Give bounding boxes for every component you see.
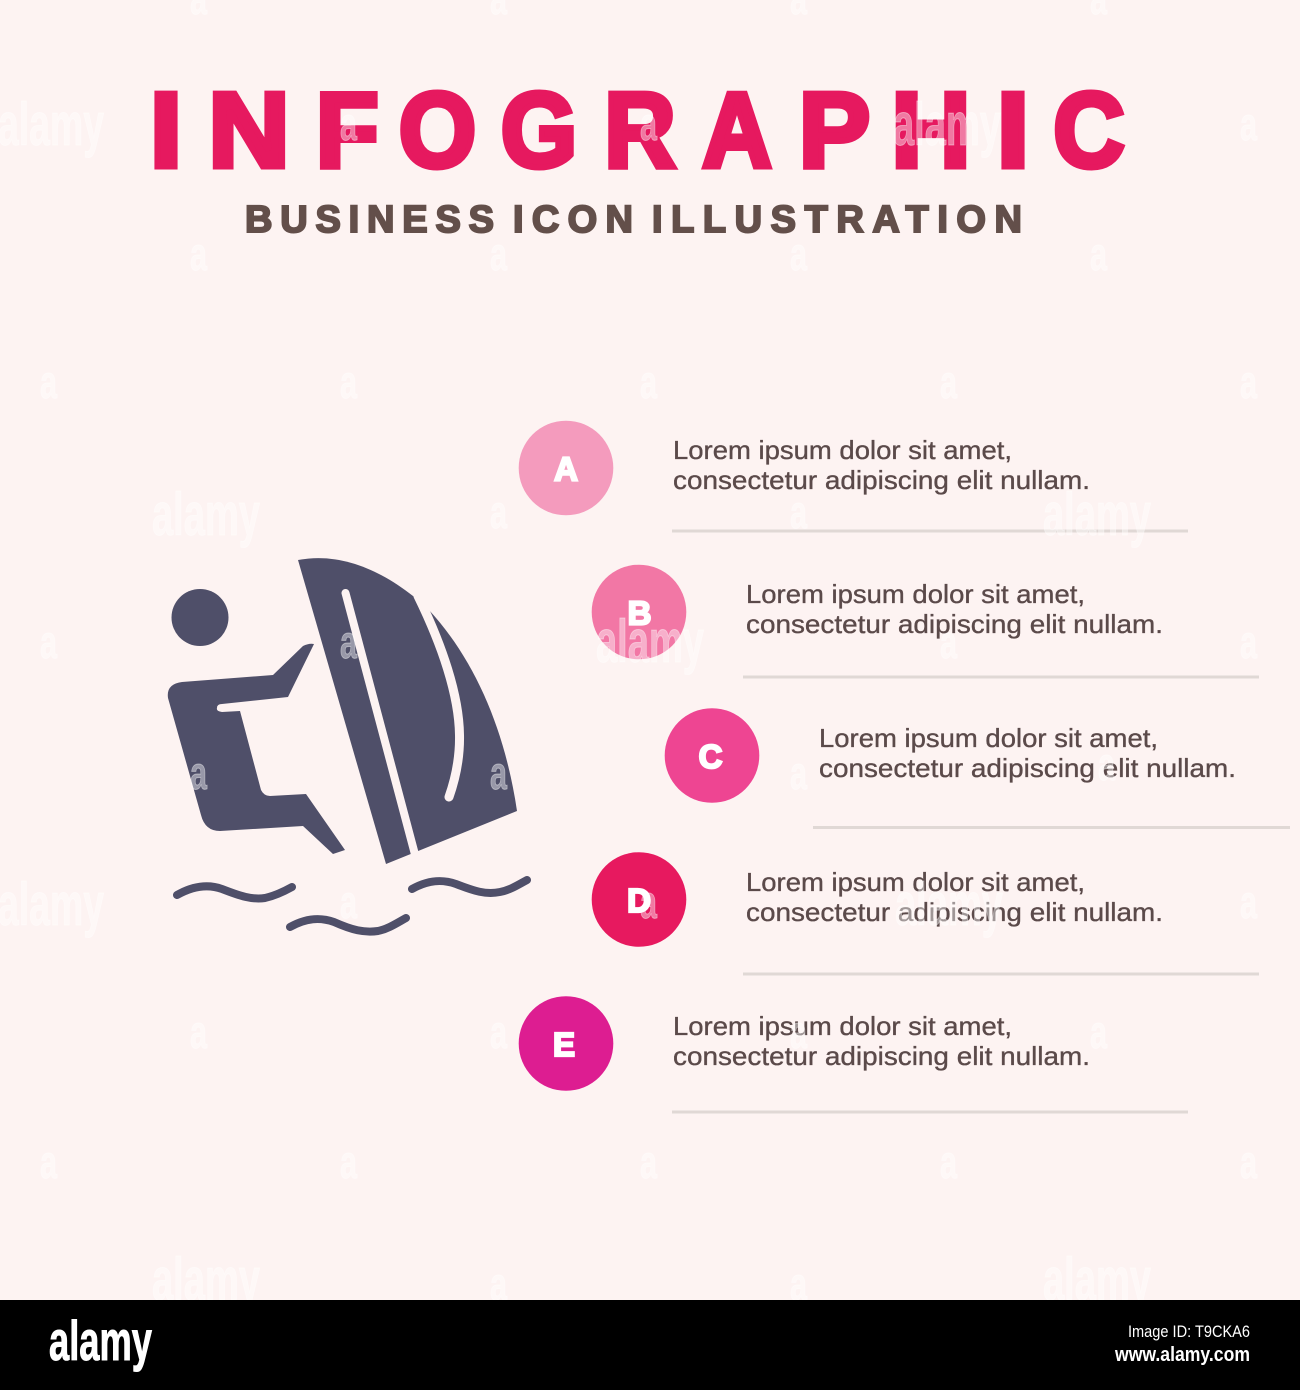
watermarks: a bbox=[1240, 616, 1257, 668]
subtitle: ILLUSTRATION bbox=[652, 199, 1022, 241]
title: G bbox=[501, 72, 577, 190]
watermarks: a bbox=[1098, 738, 1115, 790]
watermarks: a bbox=[340, 616, 357, 668]
title: C bbox=[1054, 72, 1124, 190]
icon: body bbox=[168, 644, 345, 854]
watermarks: a bbox=[790, 747, 807, 799]
divider D bbox=[743, 972, 1259, 976]
step A bbox=[519, 421, 1188, 532]
text E: Lorem ipsum dolor sit amet, bbox=[673, 1011, 1012, 1041]
watermarks: alamy bbox=[152, 481, 260, 548]
watermarks: a bbox=[1240, 98, 1257, 150]
step D bbox=[592, 852, 1259, 976]
circle D bbox=[592, 852, 686, 947]
title: P bbox=[799, 72, 870, 190]
title bbox=[150, 72, 1124, 190]
watermarks: a bbox=[40, 616, 57, 668]
image id: Image ID: T9CKA6 bbox=[1128, 1322, 1250, 1341]
watermarks: a bbox=[190, 1006, 207, 1058]
icon: sail curve slit bbox=[418, 596, 460, 797]
icon: sail bbox=[298, 558, 517, 864]
watermarks: a bbox=[340, 98, 357, 150]
title: I bbox=[997, 72, 1029, 190]
text A: consectetur adipiscing elit nullam. bbox=[673, 465, 1090, 495]
watermarks: a bbox=[490, 1258, 507, 1310]
watermarks: a bbox=[490, 1006, 507, 1058]
title: I bbox=[150, 72, 182, 190]
title: F bbox=[316, 72, 378, 190]
title: H bbox=[892, 72, 970, 190]
text B: Lorem ipsum dolor sit amet, bbox=[746, 579, 1085, 609]
watermarks: alamy bbox=[1043, 1246, 1151, 1313]
divider C bbox=[813, 826, 1290, 829]
icon: wave left bbox=[177, 886, 292, 899]
subtitle: ICON bbox=[513, 199, 633, 241]
letter C: C bbox=[699, 738, 722, 775]
watermarks: a bbox=[490, 228, 507, 280]
watermarks: alamy bbox=[596, 608, 704, 675]
watermarks: a bbox=[640, 356, 657, 408]
text B bbox=[746, 579, 1163, 639]
watermarks: a bbox=[40, 356, 57, 408]
title: N bbox=[208, 72, 290, 190]
text D bbox=[746, 867, 1163, 927]
letter B: B bbox=[628, 594, 651, 632]
watermarks: a bbox=[340, 876, 357, 928]
website: www.alamy.com bbox=[1114, 1344, 1250, 1366]
watermarks: a bbox=[1240, 356, 1257, 408]
watermarks: a bbox=[1090, 228, 1107, 280]
footer bar bbox=[0, 1300, 1300, 1390]
watermarks: alamy bbox=[0, 871, 104, 938]
text D: Lorem ipsum dolor sit amet, bbox=[746, 867, 1085, 897]
watermarks: a bbox=[940, 616, 957, 668]
watermarks: a bbox=[790, 1006, 807, 1058]
text C bbox=[819, 723, 1236, 783]
watermarks: a bbox=[640, 98, 657, 150]
watermarks: alamy bbox=[152, 1246, 260, 1313]
circle B bbox=[592, 565, 686, 659]
watermarks: a bbox=[40, 1136, 57, 1188]
text C: consectetur adipiscing elit nullam. bbox=[819, 753, 1236, 783]
watermarks: a bbox=[190, 228, 207, 280]
watermarks: a bbox=[640, 876, 657, 928]
watermarks: alamy bbox=[893, 91, 1001, 158]
watermarks: alamy bbox=[895, 871, 1003, 938]
watermarks: a bbox=[790, 1258, 807, 1310]
step E bbox=[519, 996, 1188, 1114]
divider E bbox=[672, 1110, 1188, 1114]
step B bbox=[592, 565, 1259, 678]
circle A bbox=[519, 421, 613, 515]
step C bbox=[665, 708, 1290, 829]
footer logo: alamy bbox=[49, 1309, 152, 1372]
watermarks: a bbox=[490, 747, 507, 799]
circle C bbox=[665, 708, 759, 803]
watermarks: a bbox=[190, 747, 207, 799]
watermarks: a bbox=[1240, 1136, 1257, 1188]
watermarks: a bbox=[940, 356, 957, 408]
watermarks: alamy bbox=[0, 91, 104, 158]
watermarks: alamy bbox=[1043, 481, 1151, 548]
title: A bbox=[702, 72, 772, 190]
text B: consectetur adipiscing elit nullam. bbox=[746, 609, 1163, 639]
title: O bbox=[399, 72, 476, 190]
watermarks: a bbox=[640, 1136, 657, 1188]
text A: Lorem ipsum dolor sit amet, bbox=[673, 435, 1012, 465]
text E bbox=[673, 1011, 1090, 1071]
text C: Lorem ipsum dolor sit amet, bbox=[819, 723, 1158, 753]
letter A: A bbox=[554, 450, 578, 488]
title: R bbox=[604, 72, 676, 190]
icon: windsurfer on waves bbox=[168, 558, 527, 932]
watermarks: a bbox=[490, 486, 507, 538]
letter E: E bbox=[553, 1026, 575, 1063]
watermarks: a bbox=[1090, 1006, 1107, 1058]
watermarks: a bbox=[790, 228, 807, 280]
circle E bbox=[519, 996, 613, 1091]
icon: wave middle bbox=[290, 918, 406, 932]
watermarks: a bbox=[1240, 876, 1257, 928]
divider A bbox=[672, 530, 1188, 532]
text A bbox=[673, 435, 1090, 495]
text E: consectetur adipiscing elit nullam. bbox=[673, 1041, 1090, 1071]
watermarks: a bbox=[340, 1136, 357, 1188]
watermarks: a bbox=[790, 486, 807, 538]
subtitle: BUSINESS bbox=[245, 199, 494, 241]
text D: consectetur adipiscing elit nullam. bbox=[746, 897, 1163, 927]
watermarks: a bbox=[940, 1136, 957, 1188]
subtitle bbox=[245, 199, 1022, 241]
icon: wave right bbox=[412, 880, 527, 893]
watermarks: a bbox=[340, 356, 357, 408]
letter D: D bbox=[627, 882, 651, 919]
divider B bbox=[743, 676, 1259, 678]
icon: head bbox=[172, 589, 228, 646]
icon: mast slit bbox=[346, 593, 417, 862]
